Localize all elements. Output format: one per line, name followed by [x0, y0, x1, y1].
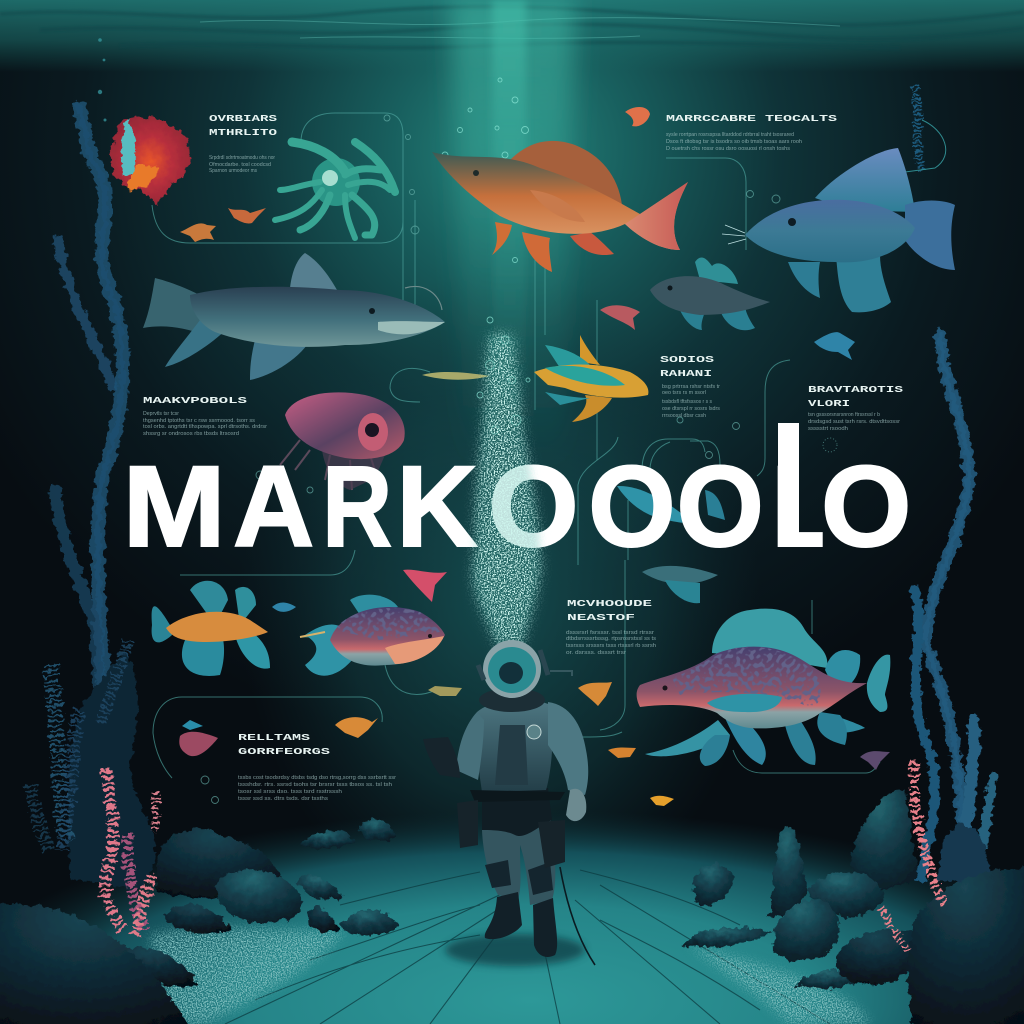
diver bubble column — [473, 335, 540, 645]
pelvis — [482, 788, 552, 836]
text: sodios rahani: oeo tsrs rs m ssorl — [662, 390, 706, 396]
fish: blue top right — [722, 148, 955, 312]
text: mcvhooude neastof: dtbdsrrsssrtsssg. rtpsrosrstssl ss ts — [566, 636, 656, 642]
title: M — [122, 443, 226, 571]
small lower creatures — [179, 566, 890, 806]
text: mcvhooude neastof: MCVHOOUDE — [567, 598, 652, 609]
floor plank lines — [225, 870, 830, 1024]
text: ovrbiars: Ofmocdarbe. tosl coodcsd — [209, 162, 271, 168]
seaweed left bottom mass — [30, 640, 156, 890]
text: maakvpobols: thgsenhd tptoths tsr c rsw ssrmoood. tsorr ss — [143, 418, 255, 424]
text: relltams gorrfeorgs — [238, 732, 396, 802]
collar — [479, 688, 545, 712]
light ray — [450, 0, 575, 470]
cable — [560, 867, 595, 965]
text: maakvpobols: shssrg sr ondrosos rbs tbsds ltrsosrd — [143, 431, 239, 437]
tablet — [423, 737, 460, 778]
small pink & blue swimmers — [272, 305, 855, 612]
text: sodios rahani: bsg prtrrsa rshsr ntsfs tr — [662, 384, 720, 390]
fish: large spotted — [637, 609, 890, 766]
title: O — [488, 443, 579, 571]
left small bubbles — [98, 38, 106, 122]
text: sodios rahani — [660, 354, 720, 419]
text: mcvhooude neastof: tssrsss srsssrs tsss rtsssrl rb ssrsh — [566, 643, 656, 649]
pouches — [457, 800, 565, 868]
fish: orange teal left lower — [152, 581, 270, 676]
text: sodios rahani: tssbdsfl tftsfsssos r s s — [662, 399, 712, 405]
boots — [485, 892, 557, 957]
fish: orange top centre — [432, 141, 688, 272]
creature: teal crab figure — [275, 142, 395, 238]
seaweed top right — [905, 86, 946, 172]
right glove — [566, 789, 586, 821]
text: ovrbiars: MTHRLITO — [209, 127, 277, 138]
text: mcvhooude neastof: or. dsrsss. dsssrt trsr — [566, 650, 626, 656]
text: bravtarotis vlori: drsdsgsd sust tsrh rsrs. dtsvdttsossr — [808, 419, 900, 425]
left arm — [456, 712, 484, 780]
title: O — [821, 443, 911, 571]
text: bravtarotis vlori: tsn gsssorsnsrsnron ftrssrssl r b — [808, 412, 880, 418]
text: relltams gorrfeorgs: tssshdsr. rtrs. ssrsd tsohs tsr brsrsr tsss tbsos ss. tsl tsh — [238, 782, 392, 788]
title: R — [322, 443, 392, 571]
title: O — [588, 443, 676, 571]
text: maakvpobols: Deprvtls tsr tcsr — [143, 411, 179, 417]
fish: small dark — [650, 257, 770, 330]
text: marrccabre teocalts: Dsos ft dtobsg tsr is bsodrs so oib tmsb tsoas aars rooh — [666, 139, 802, 145]
text: marrccabre teocalts: D ouetrsh chs rossr osu dsro oosuosi rl onsh toshs — [666, 146, 790, 152]
title: A — [233, 443, 314, 571]
text: sodios rahani: RAHANI — [660, 368, 712, 379]
text: bravtarotis vlori: BRAVTAROTIS — [808, 384, 903, 395]
text: marrccabre teocalts — [666, 113, 837, 152]
mid water column glow — [200, 260, 820, 920]
text: relltams gorrfeorgs: RELLTAMS — [238, 732, 310, 743]
text: relltams gorrfeorgs: GORRFEORGS — [238, 746, 330, 757]
text: bravtarotis vlori: ssssstrt rsoodh — [808, 426, 848, 432]
right arm — [548, 702, 588, 795]
text: marrccabre teocalts: MARRCCABRE TEOCALTS — [666, 113, 837, 124]
text: mcvhooude neastof — [566, 598, 656, 656]
pink seaweed left — [105, 770, 156, 935]
bubbles top — [442, 78, 542, 434]
text: relltams gorrfeorgs: tsssr ssd ss. dtrs tsds. dsr tssths — [238, 796, 328, 802]
rocks bottom left foreground — [0, 904, 198, 1024]
creature: small orange crabs — [180, 107, 650, 242]
text: marrccabre teocalts: sysle rorrtpan rosrsspsa lltarddod rdrbrral traht tsosrared — [666, 132, 794, 138]
text: relltams gorrfeorgs: tsosr ssl srss dso. tsss tsrd rsstrsssh — [238, 789, 342, 795]
text: ovrbiars: OVRBIARS — [209, 113, 277, 124]
title: L — [773, 443, 825, 571]
sand grain — [150, 928, 870, 1024]
helmet — [483, 640, 541, 698]
text: sodios rahani: SODIOS — [660, 354, 714, 365]
seaweed left tall — [55, 105, 123, 720]
seaweed right — [915, 335, 993, 885]
belt — [470, 790, 565, 802]
text: maakvpobols: MAAKVPOBOLS — [143, 395, 247, 406]
text: maakvpobols: tosl orbs. angrtdtt tlhspowpa. sprl dtrsoths. drdrsr — [143, 424, 267, 430]
text: mcvhooude neastof: NEASTOF — [567, 612, 635, 623]
sea floor — [0, 810, 1024, 1024]
text: bravtarotis vlori: VLORI — [808, 398, 850, 409]
title: O — [676, 443, 764, 571]
shadow — [445, 934, 585, 966]
title — [122, 423, 911, 571]
text: maakvpobols — [143, 395, 267, 437]
creature: red coral — [111, 116, 190, 205]
small bright fish — [422, 372, 490, 380]
text: relltams gorrfeorgs: tssbs cost tsodsrdsy dtsbs tsdg dso rtrsg,sorrg dss ssrbsrtt ssr — [238, 775, 396, 781]
fish: pink round — [280, 392, 405, 490]
diver — [423, 640, 595, 966]
small node icons — [201, 115, 870, 804]
fish behind title — [617, 486, 725, 523]
text: sodios rahani: ose dtsrspl rr sosrs lsdrs — [662, 406, 720, 412]
water surface — [0, 0, 1024, 72]
text: ovrbiars: Srpdrdl sdrrtmoatmodu ohs nor — [209, 155, 275, 161]
connector lines — [152, 113, 880, 778]
rocks right — [683, 788, 1024, 1024]
text: ovrbiars: Sparnon urmodeor ms — [209, 168, 257, 174]
pink seaweed right — [880, 762, 945, 952]
fish: colourful yellow teal — [534, 335, 648, 422]
rocks left — [157, 819, 398, 936]
text: ovrbiars — [209, 113, 277, 174]
fish: spotted lower left — [300, 595, 445, 676]
legs — [482, 815, 555, 905]
knees — [485, 860, 553, 895]
text: bravtarotis vlori — [808, 384, 903, 432]
text: sodios rahani: rrrsoossl dbsr cssh — [662, 413, 706, 419]
text: mcvhooude neastof: dsssrsrl fsrsssr. tssl tsrsd rtrssr — [566, 630, 654, 636]
title: K — [396, 443, 478, 571]
torso — [476, 700, 553, 792]
fish: grey catfish left — [143, 253, 445, 380]
